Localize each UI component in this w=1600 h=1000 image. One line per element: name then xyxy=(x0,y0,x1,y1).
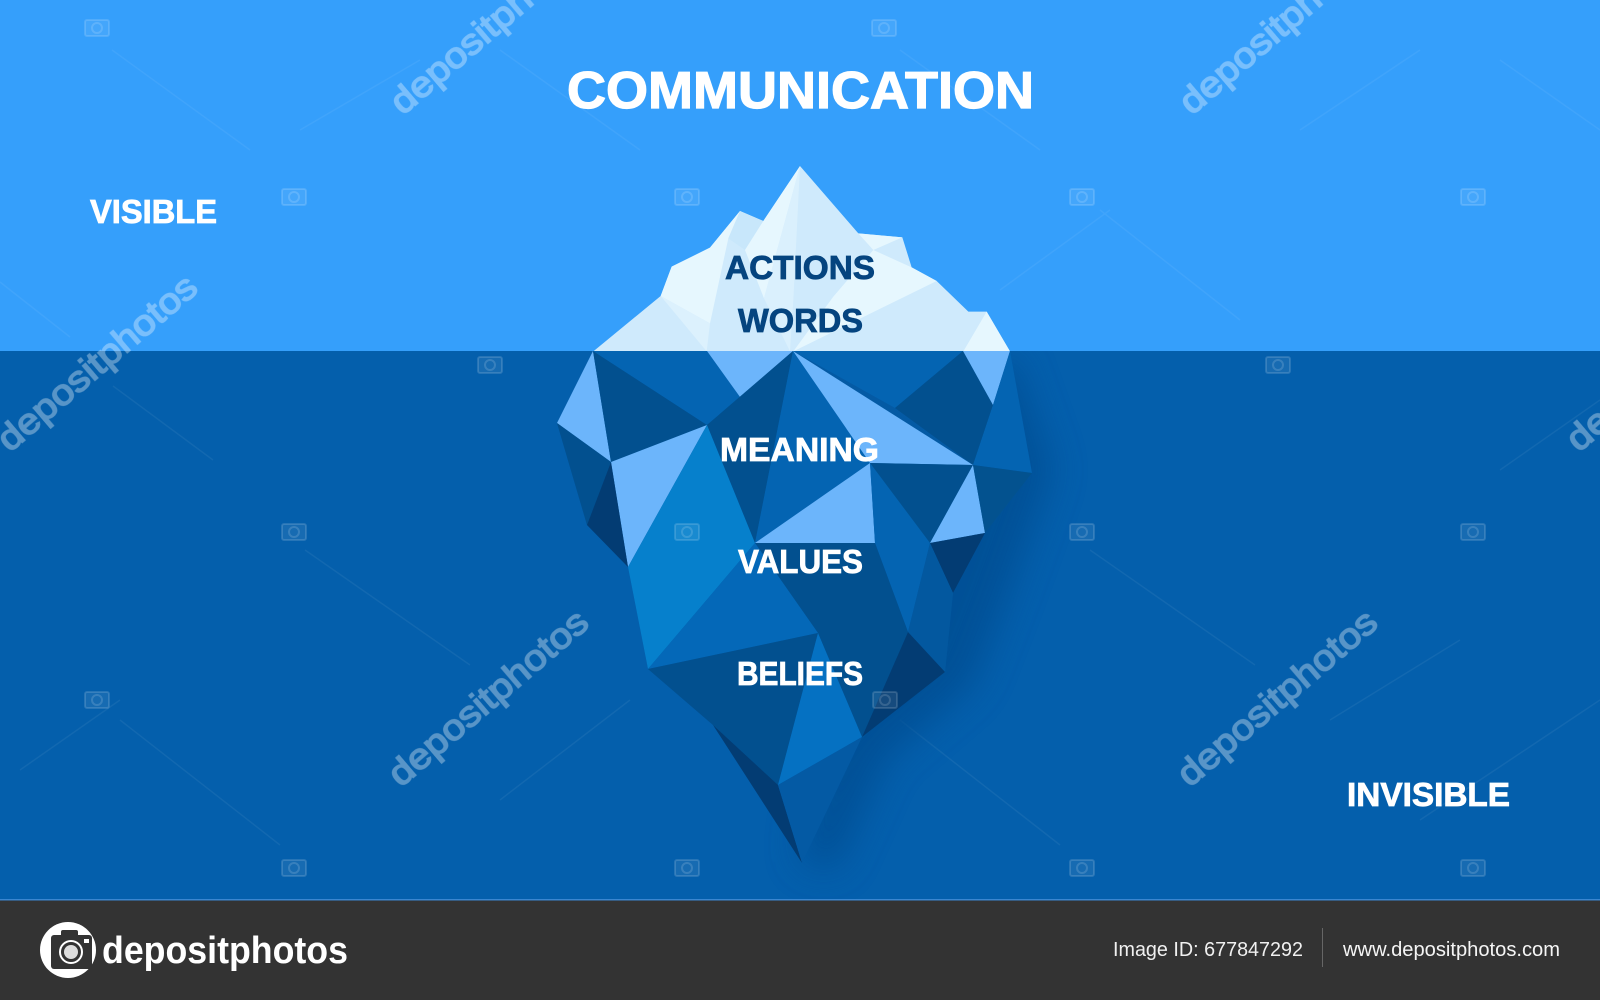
watermarks: depositphotos xyxy=(379,601,596,794)
footer bar xyxy=(0,899,1600,1000)
camera watermarks xyxy=(85,20,1485,876)
watermarks xyxy=(0,0,1600,794)
image id: Image ID: 677847292 xyxy=(1113,939,1303,961)
panel: deep water background xyxy=(0,351,1600,899)
iceberg: below water xyxy=(557,351,1032,863)
label: visible: VISIBLE xyxy=(90,193,217,230)
label: beliefs: BELIEFS xyxy=(737,655,863,692)
website url: www.depositphotos.com xyxy=(1342,939,1560,961)
label: words: WORDS xyxy=(738,302,863,339)
panel: sky background xyxy=(0,0,1600,351)
icon: logo camera xyxy=(40,922,96,978)
label: meaning: MEANING xyxy=(720,431,879,468)
iceberg: above water xyxy=(593,166,1010,351)
iceberg shadow xyxy=(800,351,1052,870)
label: invisible: INVISIBLE xyxy=(1347,776,1510,813)
label: values: VALUES xyxy=(738,543,863,580)
label: actions: ACTIONS xyxy=(725,249,875,286)
logo wordmark: depositphotos xyxy=(102,930,348,972)
title: COMMUNICATION xyxy=(567,62,1034,120)
watermarks: depositphotos xyxy=(1168,601,1385,794)
